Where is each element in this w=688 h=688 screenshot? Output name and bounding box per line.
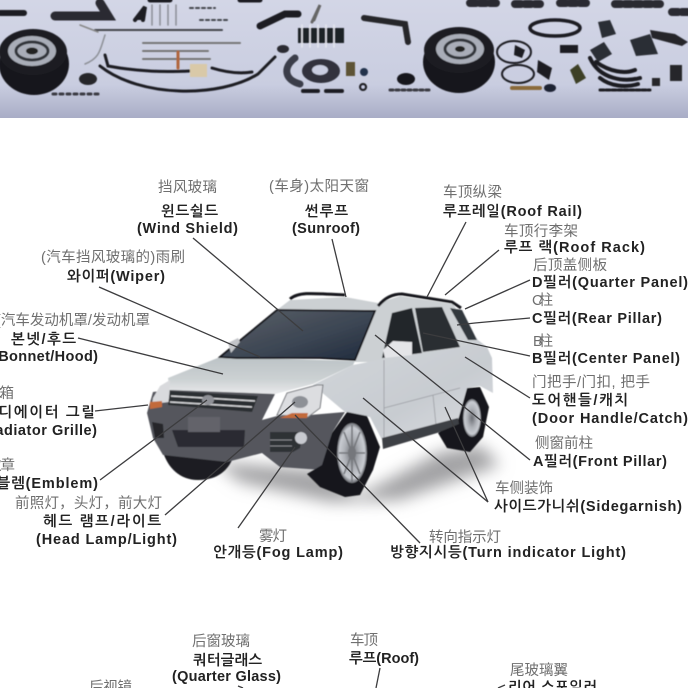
label: bonnet hood: 본넷/후드	[11, 331, 76, 348]
label: quarter panel	[532, 257, 688, 291]
label: radiator grille	[0, 385, 97, 439]
label: quarter glass: (Quarter Glass)	[172, 669, 281, 685]
label: wind shield: (Wind Shield)	[137, 221, 238, 237]
label: roof rack: 车顶行李架	[504, 223, 578, 240]
door mirror	[383, 341, 412, 358]
label: center panel: B필러(Center Panel)	[532, 350, 680, 367]
label: rear spoiler: 尾玻璃翼	[510, 662, 568, 679]
label: roof rack	[504, 223, 645, 256]
icon: control arms and top parts	[0, 0, 408, 42]
rear wheel	[438, 387, 489, 452]
label: rear pillar: C필러(Rear Pillar)	[532, 310, 662, 327]
left lamp	[152, 380, 170, 404]
label: sidegarnish	[494, 480, 682, 515]
roof	[277, 296, 478, 362]
front wheel	[307, 412, 380, 497]
label: sunroof: 썬루프	[305, 203, 348, 220]
label: quarter glass: 쿼터글래스	[193, 652, 262, 669]
door seams and sill	[382, 360, 460, 449]
label: wiper: (汽车挡风玻璃的)雨刷	[41, 249, 185, 266]
front-left wheel	[163, 452, 233, 480]
bumper	[147, 390, 345, 470]
label: door handle: 도어핸들/캐치	[532, 392, 628, 409]
label: head lamp: 前照灯，头灯，前大灯	[15, 495, 162, 512]
label: head lamp: (Head Lamp/Light)	[36, 532, 177, 548]
label: wind shield	[137, 179, 238, 237]
ground shadow	[215, 445, 500, 502]
label: door handle: (Door Handle/Catch)	[532, 411, 688, 427]
label: roof rail: 车顶纵梁	[443, 184, 502, 201]
label: door handle: 门把手/门扣, 把手	[532, 374, 650, 391]
label: roof rail	[443, 184, 582, 220]
label: head lamp: 헤드 램프/라이트	[43, 513, 161, 530]
label: quarter glass	[172, 633, 281, 685]
roof rails	[290, 294, 461, 308]
label: roof	[349, 632, 419, 667]
leader lines	[78, 222, 530, 688]
label: sidegarnish: 车侧装饰	[495, 480, 553, 497]
label: front pillar: A필러(Front Pillar)	[533, 453, 667, 470]
label: fog lamp	[213, 528, 343, 561]
label: wiper: 와이퍼(Wiper)	[67, 268, 165, 285]
label: rear pillar	[532, 292, 662, 327]
label: fog lamp: 雾灯	[259, 528, 287, 545]
icon: small parts cluster on right	[470, 3, 688, 92]
body side	[313, 340, 493, 440]
label: roof: 루프(Roof)	[349, 651, 419, 667]
icon: exhaust and pipes	[80, 25, 275, 91]
label: sunroof: (Sunroof)	[292, 221, 360, 237]
label: sidegarnish: 사이드가니쉬(Sidegarnish)	[494, 498, 682, 515]
label: rear pillar: C柱	[532, 292, 554, 309]
label: wind shield: 윈드쉴드	[161, 203, 218, 220]
icon: coil spring and discs	[53, 5, 430, 94]
windshield	[220, 310, 375, 360]
fog lamp	[270, 432, 307, 452]
label: turn indicator: 방향지시등(Turn indicator Light)	[390, 544, 626, 561]
label: roof rail: 루프레일(Roof Rail)	[443, 203, 582, 220]
left mirror	[228, 338, 240, 353]
label: sunroof: (车身)太阳天窗	[269, 178, 369, 195]
car illustration: silver SUV	[147, 294, 500, 502]
grille	[168, 391, 258, 412]
label: fog lamp: 안개등(Fog Lamp)	[213, 544, 343, 561]
label: quarter panel: 后顶盖侧板	[533, 257, 608, 274]
label: roof rack: 루프 랙(Roof Rack)	[504, 239, 645, 256]
label: center panel: B柱	[533, 333, 554, 350]
label: roof: 车顶	[350, 632, 378, 649]
label: emblem	[0, 457, 98, 492]
label: front pillar: 侧窗前柱	[535, 435, 594, 452]
label: head lamp	[15, 495, 177, 548]
label: turn indicator	[390, 529, 626, 561]
photo banner: disassembled car parts	[0, 0, 688, 118]
label: turn indicator: 转向指示灯	[429, 529, 501, 546]
head lamp	[277, 385, 323, 418]
label: sunroof	[269, 178, 369, 237]
label: rear spoiler	[508, 662, 597, 688]
icon: left tire	[0, 29, 69, 95]
label: front pillar	[533, 435, 667, 470]
label: bonnet hood: (汽车发动机罩/发动机罩	[0, 312, 150, 329]
label: door handle	[532, 374, 688, 427]
label: bonnet hood	[0, 312, 150, 365]
hood	[168, 357, 355, 394]
label: center panel	[532, 333, 680, 367]
lower air intake	[172, 430, 245, 447]
icon: right tire	[423, 27, 495, 93]
side windows	[382, 307, 477, 358]
label: quarter glass: 后窗玻璃	[192, 633, 250, 650]
label: wind shield: 挡风玻璃	[158, 179, 217, 196]
label: wiper	[41, 249, 185, 285]
label: quarter panel: D필러(Quarter Panel)	[532, 274, 688, 291]
